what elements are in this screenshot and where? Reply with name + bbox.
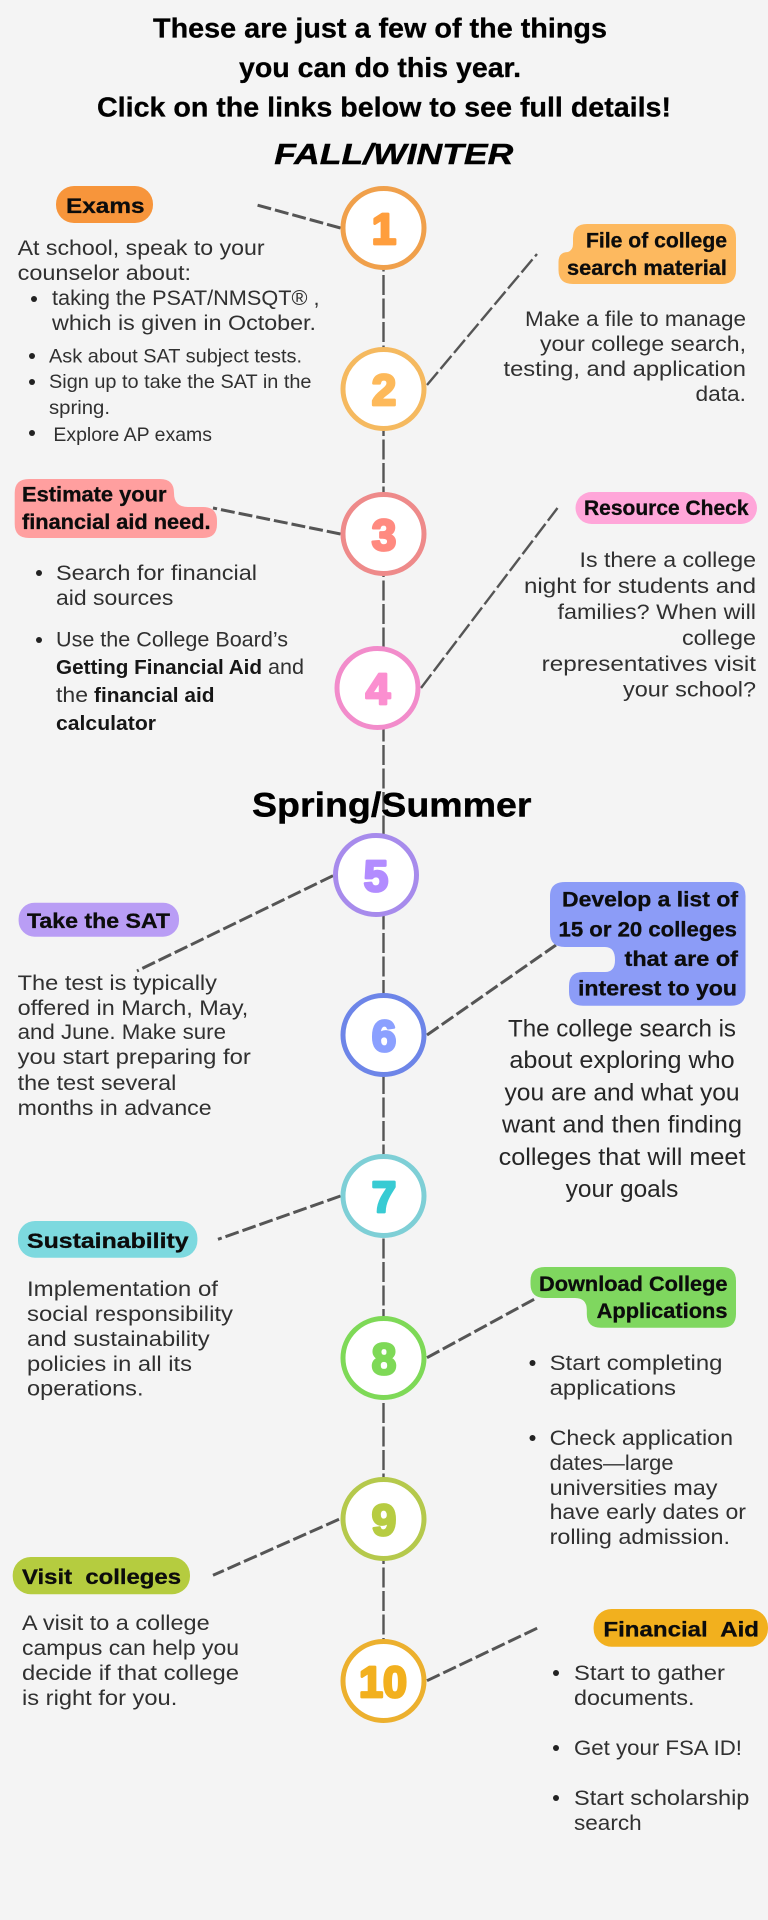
title: These are just a few of the things xyxy=(153,13,607,44)
connector 6 xyxy=(427,945,556,1035)
applications text: dates—large xyxy=(550,1452,674,1475)
applications text: rolling admission. xyxy=(550,1526,730,1549)
resource text: representatives visit xyxy=(542,653,756,676)
label: file of college search material: File of college xyxy=(586,230,727,253)
step 4 badge xyxy=(337,648,418,728)
sustainability text xyxy=(27,1278,234,1401)
visit text: campus can help you xyxy=(22,1637,239,1660)
panel: financial aid xyxy=(553,1609,768,1835)
visit text: A visit to a college xyxy=(22,1612,210,1635)
financial aid checklist: Start scholarship xyxy=(574,1787,749,1810)
label: file of college search material: search material xyxy=(567,257,727,280)
resource text: Is there a college xyxy=(580,549,756,572)
exams text: Explore AP exams xyxy=(53,424,212,446)
panel: resource check xyxy=(524,492,757,702)
title: Click on the links below to see full details! xyxy=(97,92,671,123)
heading: spring/summer: Spring/Summer xyxy=(252,787,532,825)
SAT text: offered in March, May, xyxy=(18,997,248,1020)
visit text: decide if that college xyxy=(22,1662,239,1685)
exams text: spring. xyxy=(49,397,110,419)
label: download college applications: Download College xyxy=(539,1273,728,1296)
college search text: your goals xyxy=(566,1176,678,1203)
resource text: college xyxy=(682,627,756,650)
label: download college applications xyxy=(530,1267,736,1328)
panel: visit colleges xyxy=(13,1557,239,1710)
financial aid text: Search for financial xyxy=(56,562,257,585)
financial aid text xyxy=(36,562,304,735)
label: sustainability xyxy=(18,1221,197,1258)
label: develop a list of colleges: interest to you xyxy=(578,978,737,1001)
exams text: counselor about: xyxy=(18,262,191,285)
financial aid text: aid sources xyxy=(56,587,173,610)
step 3 badge: 3 xyxy=(372,511,396,560)
financial aid text: the xyxy=(56,684,88,707)
file text: Make a file to manage xyxy=(525,308,746,331)
connector 3 xyxy=(213,508,340,534)
step 10 badge: 10 xyxy=(359,1658,407,1707)
label: develop a list of colleges: 15 or 20 colleges xyxy=(558,919,737,942)
connector 2 xyxy=(427,254,537,385)
connector 8 xyxy=(427,1298,537,1358)
heading: fall/winter: FALL/WINTER xyxy=(274,139,513,171)
SAT text: the test several xyxy=(18,1072,176,1095)
label: exams xyxy=(56,186,153,223)
step 6 badge xyxy=(343,996,424,1074)
SAT text: you start preparing for xyxy=(18,1046,251,1069)
step 2 badge xyxy=(343,350,424,428)
step 7 badge: 7 xyxy=(372,1173,396,1222)
college search text: about exploring who xyxy=(509,1047,735,1074)
step 3 badge xyxy=(343,494,424,574)
exams text: Ask about SAT subject tests. xyxy=(49,346,302,368)
label: resource check xyxy=(576,492,757,524)
exams text: taking the PSAT/NMSQT® , xyxy=(52,287,320,310)
title: you can do this year. xyxy=(239,52,521,83)
sustainability text: Implementation of xyxy=(27,1278,218,1301)
connector 10 xyxy=(427,1627,539,1681)
sustainability text: social responsibility xyxy=(27,1303,234,1326)
applications text xyxy=(530,1352,746,1549)
financial aid text: Use the College Board’s xyxy=(56,629,288,652)
panel: estimate financial aid xyxy=(15,479,304,735)
step 2 badge: 2 xyxy=(372,366,396,415)
step 1 badge: 1 xyxy=(372,205,396,254)
applications text: universities may xyxy=(550,1477,718,1500)
panel: file of college search material xyxy=(504,224,746,406)
exams text: which is given in October. xyxy=(51,312,316,335)
financial aid checklist: Start to gather xyxy=(574,1662,725,1685)
label: financial aid: Financial Aid xyxy=(603,1619,759,1642)
sustainability text: policies in all its xyxy=(27,1353,192,1376)
step 1 badge xyxy=(343,188,424,268)
label: file of college search material xyxy=(558,224,736,284)
connector 7 xyxy=(218,1196,340,1239)
title xyxy=(97,13,671,123)
applications text: applications xyxy=(550,1377,676,1400)
label: estimate your financial aid need: financial aid need. xyxy=(22,511,211,534)
financial aid text: Getting Financial Aid xyxy=(56,656,262,679)
file text: testing, and application xyxy=(504,358,746,381)
college search text: colleges that will meet xyxy=(499,1144,746,1171)
timeline spine xyxy=(382,228,385,1681)
label: financial aid xyxy=(594,1609,768,1647)
connector 5 xyxy=(137,876,333,971)
step 9 badge: 9 xyxy=(372,1496,396,1545)
step 10 badge xyxy=(343,1642,424,1720)
financial aid text: financial aid xyxy=(94,684,214,707)
label: develop a list of colleges: Develop a list of xyxy=(562,889,739,912)
SAT text xyxy=(18,972,251,1120)
label: develop a list of colleges: that are of xyxy=(624,948,739,971)
financial aid text: calculator xyxy=(56,712,156,735)
visit text xyxy=(22,1612,239,1710)
resource text: night for students and xyxy=(524,575,756,598)
visit text: is right for you. xyxy=(22,1687,177,1710)
label: visit colleges: Visit colleges xyxy=(22,1566,181,1589)
label: sustainability: Sustainability xyxy=(27,1230,189,1253)
step 5 badge: 5 xyxy=(364,852,388,901)
financial aid checklist: Get your FSA ID! xyxy=(574,1737,742,1760)
financial aid text: and xyxy=(268,656,304,679)
applications text: Start completing xyxy=(550,1352,722,1375)
step 4 badge: 4 xyxy=(366,665,391,714)
sustainability text: and sustainability xyxy=(27,1328,210,1351)
connector 4 xyxy=(421,508,558,688)
step 9 badge xyxy=(343,1480,424,1558)
financial aid checklist: documents. xyxy=(574,1687,694,1710)
label: estimate your financial aid need xyxy=(15,479,217,538)
label: estimate your financial aid need: Estimate your xyxy=(22,484,166,507)
exams text xyxy=(18,237,319,446)
label: take the SAT xyxy=(19,903,179,937)
college search text xyxy=(499,1016,746,1203)
connector 1 xyxy=(257,205,340,228)
panel: sustainability xyxy=(18,1221,234,1401)
financial aid checklist xyxy=(553,1662,749,1835)
label: exams: Exams xyxy=(66,195,144,218)
label: resource check: Resource Check xyxy=(584,497,749,520)
connector 9 xyxy=(213,1519,339,1575)
resource text xyxy=(524,549,756,702)
applications text: Check application xyxy=(550,1427,733,1450)
panel: exams xyxy=(18,186,319,446)
step 6 badge: 6 xyxy=(372,1012,396,1061)
step 7 badge xyxy=(343,1156,424,1236)
panel: download college applications xyxy=(530,1267,746,1549)
panel: take the SAT xyxy=(18,903,251,1120)
step 5 badge xyxy=(336,836,416,914)
label: take the SAT: Take the SAT xyxy=(27,910,170,933)
step 8 badge: 8 xyxy=(372,1335,396,1384)
exams text: Sign up to take the SAT in the xyxy=(49,371,312,393)
label: download college applications: Applications xyxy=(597,1300,728,1323)
panel: develop a list of colleges xyxy=(499,882,746,1203)
resource text: families? When will xyxy=(558,601,756,624)
file text: data. xyxy=(696,383,746,406)
label: develop a list of colleges xyxy=(550,882,746,1006)
file text xyxy=(504,308,746,406)
SAT text: months in advance xyxy=(18,1097,212,1120)
college search text: want and then finding xyxy=(501,1112,742,1139)
SAT text: and June. Make sure xyxy=(18,1021,226,1044)
college search text: you are and what you xyxy=(504,1080,740,1107)
step 8 badge xyxy=(343,1318,424,1398)
applications text: have early dates or xyxy=(550,1501,746,1524)
sustainability text: operations. xyxy=(27,1378,144,1401)
label: visit colleges xyxy=(13,1557,190,1594)
resource text: your school? xyxy=(623,679,756,702)
exams text: At school, speak to your xyxy=(18,237,265,260)
file text: your college search, xyxy=(540,333,746,356)
college search text: The college search is xyxy=(508,1016,736,1043)
financial aid checklist: search xyxy=(574,1812,642,1835)
SAT text: The test is typically xyxy=(18,972,218,995)
